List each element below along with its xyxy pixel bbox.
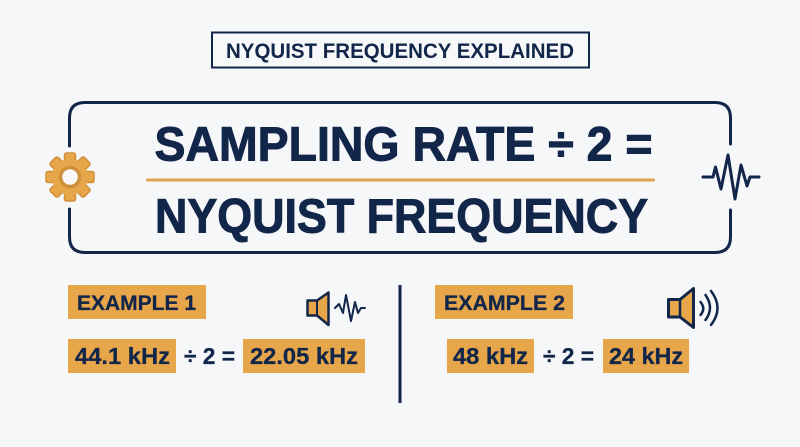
formula divider xyxy=(146,178,655,182)
example 2 equation: ÷ 2 = xyxy=(543,343,594,369)
example 2 equation xyxy=(447,339,689,373)
example 2 label xyxy=(435,285,573,319)
example 2 equation: 48 kHz xyxy=(453,343,528,369)
formula line 2: NYQUIST FREQUENCY xyxy=(155,190,648,244)
panel: formula xyxy=(70,102,730,252)
title: NYQUIST FREQUENCY EXPLAINED xyxy=(226,40,574,63)
example 2 equation: 24 kHz xyxy=(609,343,683,369)
icon: speaker with wave xyxy=(308,292,365,325)
panel: example 2 xyxy=(435,285,718,373)
title xyxy=(212,32,589,68)
icon: waveform xyxy=(703,155,759,199)
example 1 equation: 22.05 kHz xyxy=(250,343,358,369)
icon: gear xyxy=(46,153,94,201)
example 1 label: EXAMPLE 1 xyxy=(77,292,196,315)
example 1 label xyxy=(68,285,206,319)
formula line 1: SAMPLING RATE ÷ 2 = xyxy=(154,118,652,172)
vertical divider xyxy=(398,285,402,403)
example 1 equation: ÷ 2 = xyxy=(184,343,235,369)
example 2 label: EXAMPLE 2 xyxy=(444,292,565,315)
formula frame xyxy=(70,102,730,252)
icon: speaker with sound arcs xyxy=(668,288,718,328)
panel: example 1 xyxy=(68,285,365,373)
example 1 equation: 44.1 kHz xyxy=(75,343,170,369)
example 1 equation xyxy=(68,339,365,373)
